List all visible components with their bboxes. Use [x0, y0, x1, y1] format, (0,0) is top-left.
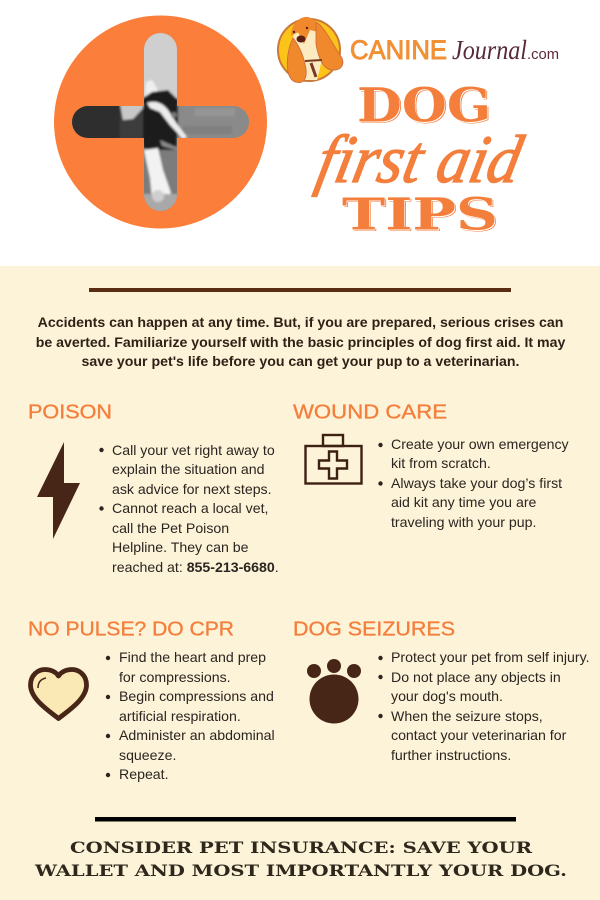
wound care bullet list: Create your own emergency [391, 436, 570, 452]
CPR bullet list [106, 649, 275, 782]
CPR bullet list: for compressions. [119, 669, 231, 685]
seizures bullet list: When the seizure stops, [391, 708, 543, 724]
closing message: pet insurance: CONSIDER PET INSURANCE: SAVE YOUR [70, 838, 532, 857]
CPR bullet list: Administer an abdominal [119, 727, 275, 743]
closing message: pet insurance [34, 838, 567, 880]
icon: heart [30, 670, 86, 718]
seizures bullet list: further instructions. [391, 747, 511, 763]
icon: first aid kit [306, 435, 362, 484]
poison bullet list: Helpline. They can be [112, 539, 249, 555]
poison bullet list: explain the situation and [112, 461, 265, 477]
wound care bullet list: kit from scratch. [391, 455, 491, 471]
intro paragraph: be averted. Familiarize yourself with the basic principles of dog first aid. It may [36, 334, 565, 350]
intro paragraph: Accidents can happen at any time. But, if you are prepared, serious crises can [38, 314, 563, 330]
title word: DOG: DOG [357, 78, 491, 134]
logo: Canine Journal [278, 17, 559, 83]
CPR bullet list: Find the heart and prep [119, 649, 266, 665]
poison bullet list: Cannot reach a local vet, [112, 500, 268, 516]
panel: poison [28, 400, 279, 575]
panel: CPR [28, 618, 275, 782]
poison bullet list: Call your vet right away to [112, 442, 275, 458]
seizures bullet list: contact your veterinarian for [391, 727, 567, 743]
intro paragraph [36, 314, 565, 369]
title word: DOG: DOG [358, 80, 492, 135]
title: Dog first aid tips [311, 78, 529, 242]
heading: no pulse do CPR: NO PULSE? DO CPR [28, 618, 234, 640]
heading: wound care: WOUND CARE [293, 400, 447, 424]
wound care bullet list: traveling with your pup. [391, 514, 536, 530]
panel: wound care [293, 400, 570, 530]
seizures bullet list [378, 649, 590, 763]
logo wordmark: Journal [452, 35, 527, 65]
poison bullet list: ask advice for next steps. [112, 481, 272, 497]
heading: poison: POISON [28, 400, 112, 424]
wound care bullet list: aid kit any time you are [391, 494, 537, 510]
icon: paw print [307, 659, 361, 724]
logo wordmark [350, 35, 559, 65]
photo badge: orange circle with dog photo in cross [54, 16, 267, 228]
title word: TIPS: TIPS [344, 191, 500, 242]
title word: DOG: DOG [358, 79, 492, 134]
seizures bullet list: Protect your pet from self injury. [391, 649, 590, 665]
CPR bullet list: squeeze. [119, 747, 176, 763]
wound care bullet list: Always take your dog’s first [391, 475, 562, 491]
heading: dog seizures: DOG SEIZURES [293, 618, 455, 640]
icon: lightning bolt [37, 442, 80, 539]
CPR bullet list: Repeat. [119, 766, 169, 782]
logo icon: basset hound in circle [278, 17, 343, 83]
seizures bullet list: Do not place any objects in [391, 669, 561, 685]
title words: first aid: first aid [311, 122, 529, 197]
logo wordmark: .com [527, 46, 559, 63]
CPR bullet list: Begin compressions and [119, 688, 274, 704]
closing message: pet insurance: WALLET AND MOST IMPORTANTLY YOUR DOG. [34, 861, 567, 880]
wound care bullet list [378, 436, 570, 530]
poison bullet list: call the Pet Poison [112, 520, 229, 536]
panel: dog seizures [293, 618, 590, 763]
poison bullet list: reached at: 855-213-6680. [112, 559, 279, 575]
seizures bullet list: your dog's mouth. [391, 688, 503, 704]
CPR bullet list: artificial respiration. [119, 708, 241, 724]
title word: TIPS: TIPS [342, 190, 498, 240]
poison bullet list [99, 442, 279, 575]
logo wordmark: CANINE [350, 35, 447, 65]
title word: TIPS: TIPS [343, 190, 499, 241]
intro paragraph: save your pet's life before you can get your pup to a veterinarian. [82, 353, 519, 369]
